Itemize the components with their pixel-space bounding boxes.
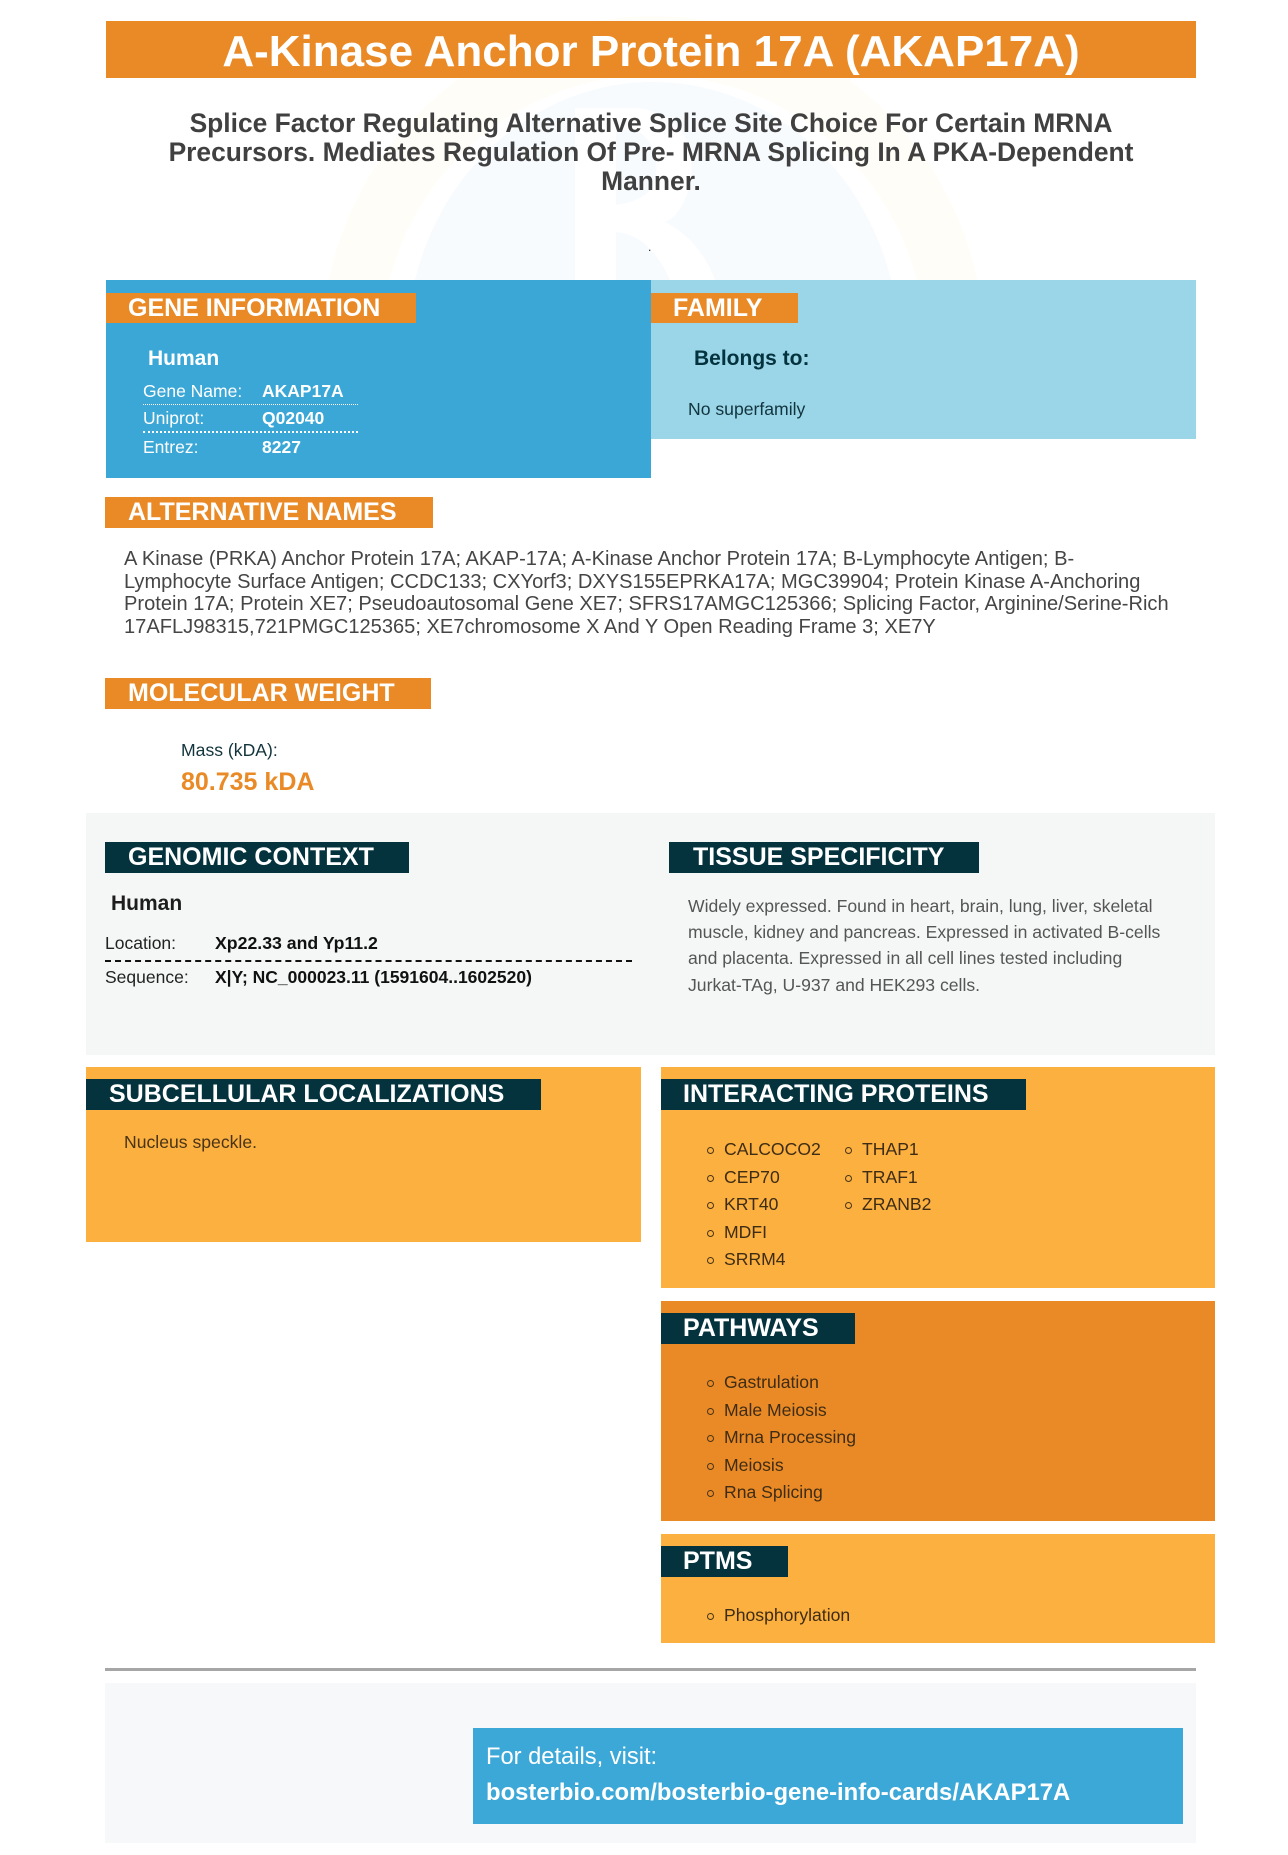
panel: pathways	[661, 1301, 1215, 1521]
mass label: Mass (kDA):	[181, 740, 278, 760]
pathway list: Mrna Processing	[724, 1427, 856, 1447]
protein list column 1: SRRM4	[724, 1249, 786, 1269]
pathway list: Male Meiosis	[724, 1400, 827, 1420]
heading: interacting proteins: INTERACTING PROTEINS	[683, 1080, 989, 1108]
watermark logo	[0, 0, 1288, 280]
entrez row	[143, 437, 301, 457]
pathway list: Gastrulation	[724, 1372, 819, 1392]
entrez row: Entrez:	[143, 437, 198, 457]
panel: family	[651, 280, 1196, 439]
alternative names text: Protein 17A; Protein XE7; Pseudoautosomal Gene XE7; SFRS17AMGC125366; Splicing Factor, Arginine/Serine-Rich	[124, 593, 1169, 615]
species label: Human	[148, 347, 219, 370]
heading: molecular weight: MOLECULAR WEIGHT	[128, 679, 395, 707]
entrez row: 8227	[262, 437, 301, 457]
sequence row: X|Y; NC_000023.11 (1591604..1602520)	[215, 967, 532, 987]
location row	[105, 931, 632, 962]
tissue specificity text: and placenta. Expressed in all cell lines tested including	[688, 948, 1122, 968]
panel: footer	[105, 1683, 1196, 1843]
gene name row: AKAP17A	[262, 381, 344, 401]
heading: tissue specificity: TISSUE SPECIFICITY	[693, 843, 944, 871]
gene name row	[143, 380, 358, 405]
pathway list: Rna Splicing	[724, 1482, 823, 1502]
gene name row: Gene Name:	[143, 381, 242, 401]
species label: Human	[111, 892, 182, 915]
protein list column 2	[845, 1139, 931, 1214]
pathway list	[707, 1372, 856, 1502]
subtitle description: Splice Factor Regulating Alternative Splice Site Choice For Certain MRNA	[190, 108, 1112, 138]
title banner: A-Kinase Anchor Protein 17A (AKAP17A)	[222, 27, 1080, 76]
tissue specificity text: muscle, kidney and pancreas. Expressed in activated B-cells	[688, 922, 1160, 942]
alternative names text: A Kinase (PRKA) Anchor Protein 17A; AKAP-17A; A-Kinase Anchor Protein 17A; B-Lymphocyte Antigen; B-	[124, 548, 1074, 570]
footer rule	[105, 1668, 1196, 1671]
protein list column 2: THAP1	[862, 1139, 919, 1159]
heading: genomic context: GENOMIC CONTEXT	[128, 843, 374, 871]
heading: alternative names: ALTERNATIVE NAMES	[128, 498, 397, 526]
callout url: bosterbio.com/bosterbio-gene-info-cards/AKAP17A	[486, 1779, 1070, 1806]
location row: Location:	[105, 933, 176, 953]
sequence row: Sequence:	[105, 967, 189, 987]
subtitle description	[169, 108, 1134, 196]
panel: genomic context and tissue specificity	[86, 813, 1215, 1055]
ptm list: Phosphorylation	[724, 1605, 850, 1625]
tissue specificity text	[688, 896, 1160, 995]
subtitle description: Precursors. Mediates Regulation Of Pre- MRNA Splicing In A PKA-Dependent	[169, 137, 1133, 167]
protein list column 1: KRT40	[724, 1194, 778, 1214]
title banner	[106, 21, 1196, 78]
heading: ptms	[661, 1546, 788, 1577]
callout: details link	[473, 1728, 1183, 1824]
protein list column 2: ZRANB2	[862, 1194, 931, 1214]
panel: ptms	[661, 1534, 1215, 1643]
protein list column 1: CEP70	[724, 1167, 780, 1187]
heading: family	[651, 293, 798, 323]
tissue specificity text: Jurkat-TAg, U-937 and HEK293 cells.	[688, 975, 980, 995]
panel: subcellular localizations	[86, 1067, 641, 1242]
tissue specificity text: Widely expressed. Found in heart, brain, lung, liver, skeletal	[688, 896, 1153, 916]
mass value: 80.735 kDA	[181, 768, 314, 796]
panel: interacting proteins	[661, 1067, 1215, 1288]
callout label: For details, visit:	[486, 1744, 657, 1770]
belongs to label: Belongs to:	[694, 347, 810, 370]
alternative names text	[124, 548, 1169, 638]
location row: Xp22.33 and Yp11.2	[215, 933, 378, 953]
alternative names text: 17AFLJ98315,721PMGC125365; XE7chromosome X And Y Open Reading Frame 3; XE7Y	[124, 616, 936, 638]
protein list column 1	[707, 1139, 821, 1269]
protein list column 2: TRAF1	[862, 1167, 918, 1187]
protein list column 1: MDFI	[724, 1222, 767, 1242]
pathway list: Meiosis	[724, 1455, 784, 1475]
family value: No superfamily	[688, 399, 805, 419]
heading: pathways: PATHWAYS	[683, 1314, 819, 1342]
panel: gene information	[106, 280, 651, 478]
protein list column 1: CALCOCO2	[724, 1139, 821, 1159]
heading: pathways	[661, 1313, 855, 1344]
heading: family: FAMILY	[673, 294, 762, 322]
uniprot row	[143, 406, 358, 433]
uniprot row: Uniprot:	[143, 408, 204, 428]
heading: gene information: GENE INFORMATION	[128, 294, 380, 322]
stray dot: .	[648, 240, 651, 254]
heading: ptms: PTMS	[683, 1547, 752, 1575]
localization text: Nucleus speckle.	[124, 1132, 257, 1152]
alternative names text: Lymphocyte Surface Antigen; CCDC133; CXYorf3; DXYS155EPRKA17A; MGC39904; Protein Kinase A-Anchoring	[124, 570, 1140, 592]
uniprot row: Q02040	[262, 408, 324, 428]
heading: subcellular localizations: SUBCELLULAR LOCALIZATIONS	[109, 1080, 504, 1108]
subtitle description: Manner.	[601, 166, 701, 196]
